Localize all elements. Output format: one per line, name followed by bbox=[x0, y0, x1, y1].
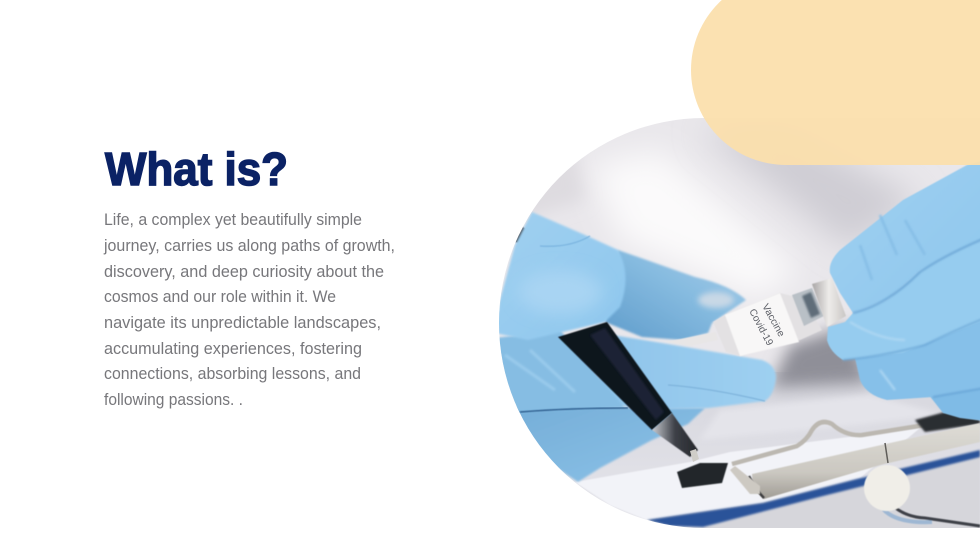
body paragraph: following passions. . bbox=[104, 391, 243, 409]
cloth background bbox=[500, 118, 967, 372]
body paragraph bbox=[103, 211, 395, 409]
photo: gloved hands holding a Covid-19 vaccine vial bbox=[495, 118, 980, 532]
third finger bbox=[855, 322, 980, 400]
fourth finger bbox=[930, 388, 980, 421]
vial label text: Vaccine bbox=[759, 302, 787, 339]
left hand: upper finger bbox=[495, 212, 626, 340]
vial label text: Covid-19 bbox=[746, 307, 775, 348]
vial label text bbox=[750, 302, 784, 345]
stethoscope ball and cable bbox=[864, 465, 980, 526]
body paragraph: discovery, and deep curiosity about the bbox=[104, 263, 384, 281]
left hand: middle finger bbox=[495, 330, 625, 412]
body paragraph: connections, absorbing lessons, and bbox=[104, 365, 361, 383]
right hand shading folds bbox=[843, 215, 980, 397]
body paragraph: journey, carries us along paths of growth, bbox=[103, 237, 395, 255]
hand fold line bbox=[520, 408, 628, 412]
vial plunger strip under finger bbox=[672, 333, 708, 342]
clipboard blue edge bbox=[647, 450, 980, 527]
vial cap bbox=[812, 278, 846, 327]
left hand: lower finger bbox=[600, 333, 776, 410]
left hand: back finger bbox=[605, 250, 746, 340]
body paragraph: Life, a complex yet beautifully simple bbox=[104, 211, 362, 229]
right hand glove bbox=[827, 160, 980, 421]
body paragraph: accumulating experiences, fostering bbox=[104, 340, 362, 358]
body paragraph: navigate its unpredictable landscapes, bbox=[104, 314, 381, 332]
middle finger bbox=[827, 235, 980, 360]
table surface bbox=[560, 372, 980, 532]
black clip block bbox=[677, 463, 728, 488]
upper finger bbox=[830, 160, 980, 313]
metal clip tube bbox=[752, 423, 980, 499]
dark clip base bbox=[915, 412, 980, 432]
body paragraph: cosmos and our role within it. We bbox=[104, 288, 336, 306]
pen top end bbox=[516, 226, 525, 243]
pen barrel bbox=[558, 322, 672, 430]
clip wire bbox=[732, 422, 925, 464]
pen metal tip bbox=[652, 413, 698, 457]
left hand: lower palm bbox=[495, 405, 705, 482]
peach rounded shape bbox=[691, 0, 980, 165]
vaccine vial bbox=[713, 278, 846, 356]
heading: What is?: What is? bbox=[105, 143, 288, 195]
paper bbox=[575, 428, 920, 520]
vial glass and neck bbox=[713, 293, 822, 356]
